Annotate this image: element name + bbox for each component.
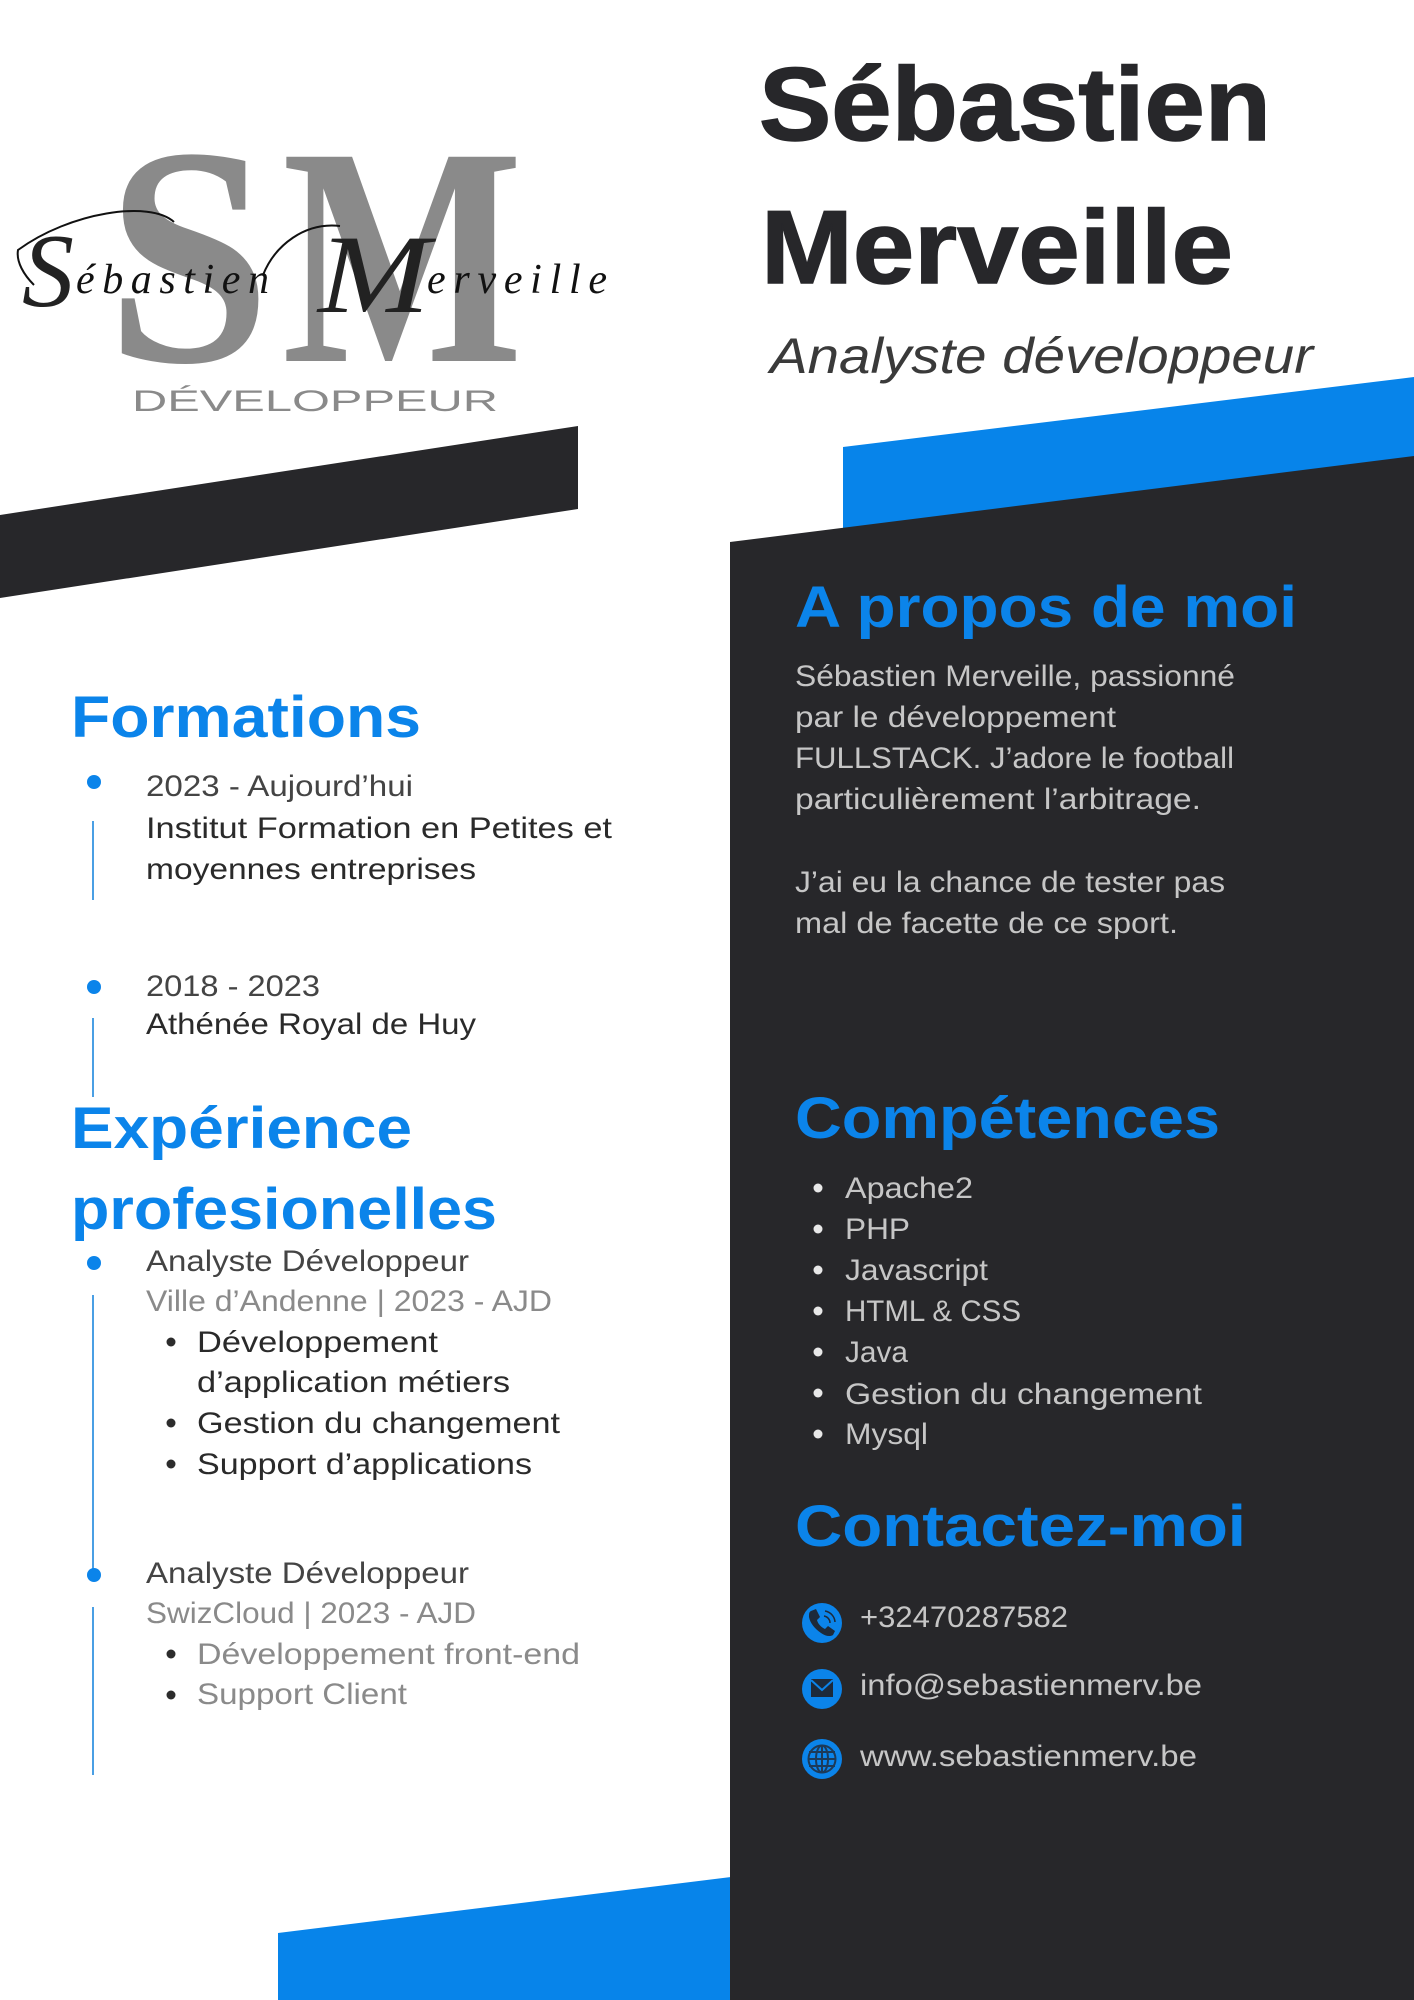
text block: experience 2: SwizCloud | 2023 - AJD (146, 1597, 476, 1630)
logo: erveille (427, 257, 607, 303)
title: name: Merveille (761, 190, 1233, 306)
logo: M (282, 84, 523, 429)
text block: formation 1: 2023 - Aujourd’hui (146, 770, 413, 803)
text block: formation 2: 2018 - 2023 (146, 970, 320, 1003)
text block: about (795, 660, 1235, 940)
list: skills: HTML & CSS (845, 1295, 1021, 1328)
subtitle: job title: Analyste développeur (767, 328, 1316, 384)
icon: email (802, 1669, 842, 1709)
text block: about: Sébastien Merveille, passionné (795, 660, 1235, 693)
list: skills: Javascript (845, 1254, 988, 1287)
heading: formations: Formations (71, 685, 421, 750)
list: skills: Mysql (845, 1418, 928, 1451)
text block: experience 2: Analyste Développeur (146, 1557, 469, 1590)
text block: formation 2 (146, 970, 476, 1041)
heading: experience: Expérience (71, 1096, 412, 1161)
text block: experience 1: Ville d’Andenne | 2023 - AJD (146, 1285, 552, 1318)
heading: contact: Contactez-moi (795, 1494, 1246, 1559)
text block: experience 2: Support Client (197, 1678, 407, 1711)
logo: M (316, 213, 437, 337)
background shape: blue band bottom (278, 1877, 731, 2000)
heading: experience (71, 1096, 497, 1242)
logo: S (106, 84, 271, 429)
text block: experience 1: Support d’applications (197, 1448, 532, 1481)
logo (18, 84, 607, 429)
title: name: Sébastien (759, 47, 1271, 163)
background shape: dark band left (0, 426, 578, 598)
text block: about: particulièrement l’arbitrage. (795, 783, 1201, 816)
text block: formation 2: Athénée Royal de Huy (146, 1008, 476, 1041)
timeline: experience (87, 1256, 101, 1775)
text block: about: FULLSTACK. J’adore le football (795, 742, 1234, 775)
text block: about: J’ai eu la chance de tester pas (795, 866, 1225, 899)
heading: experience: profesionelles (71, 1177, 497, 1242)
list: skills: Apache2 (845, 1172, 973, 1205)
heading: about: A propos de moi (795, 575, 1297, 640)
logo: ébastien (76, 257, 269, 303)
icon: phone (802, 1603, 842, 1643)
text block: experience 2 (146, 1557, 580, 1711)
text: phone: +32470287582 (860, 1601, 1068, 1634)
text block: experience 1: Gestion du changement (197, 1407, 560, 1440)
logo: S (22, 212, 74, 329)
logo: DÉVELOPPEUR (132, 385, 498, 418)
list: skills (814, 1172, 1202, 1451)
text block: experience 1 (146, 1245, 560, 1481)
text block: experience 1: Développement (197, 1326, 438, 1359)
text block: about: mal de facette de ce sport. (795, 907, 1178, 940)
panel: dark right column (730, 456, 1414, 2000)
text: website: www.sebastienmerv.be (859, 1740, 1197, 1773)
icon: globe (802, 1739, 842, 1779)
heading: skills: Compétences (795, 1086, 1220, 1151)
background shape: blue band top right (843, 377, 1414, 540)
text block: experience 1: d’application métiers (197, 1366, 510, 1399)
list: skills: Gestion du changement (845, 1378, 1202, 1411)
text: email: info@sebastienmerv.be (860, 1669, 1202, 1702)
text block: formation 1: Institut Formation en Petites et (146, 812, 612, 845)
list: skills: Java (845, 1336, 909, 1369)
text block: experience 2: Développement front-end (197, 1638, 580, 1671)
list: skills: PHP (845, 1213, 910, 1246)
text block: formation 1 (146, 770, 612, 886)
text block: experience 1: Analyste Développeur (146, 1245, 469, 1278)
timeline: formations (87, 775, 101, 1097)
text block: about: par le développement (795, 701, 1116, 734)
title: name (759, 47, 1271, 306)
text block: formation 1: moyennes entreprises (146, 853, 476, 886)
